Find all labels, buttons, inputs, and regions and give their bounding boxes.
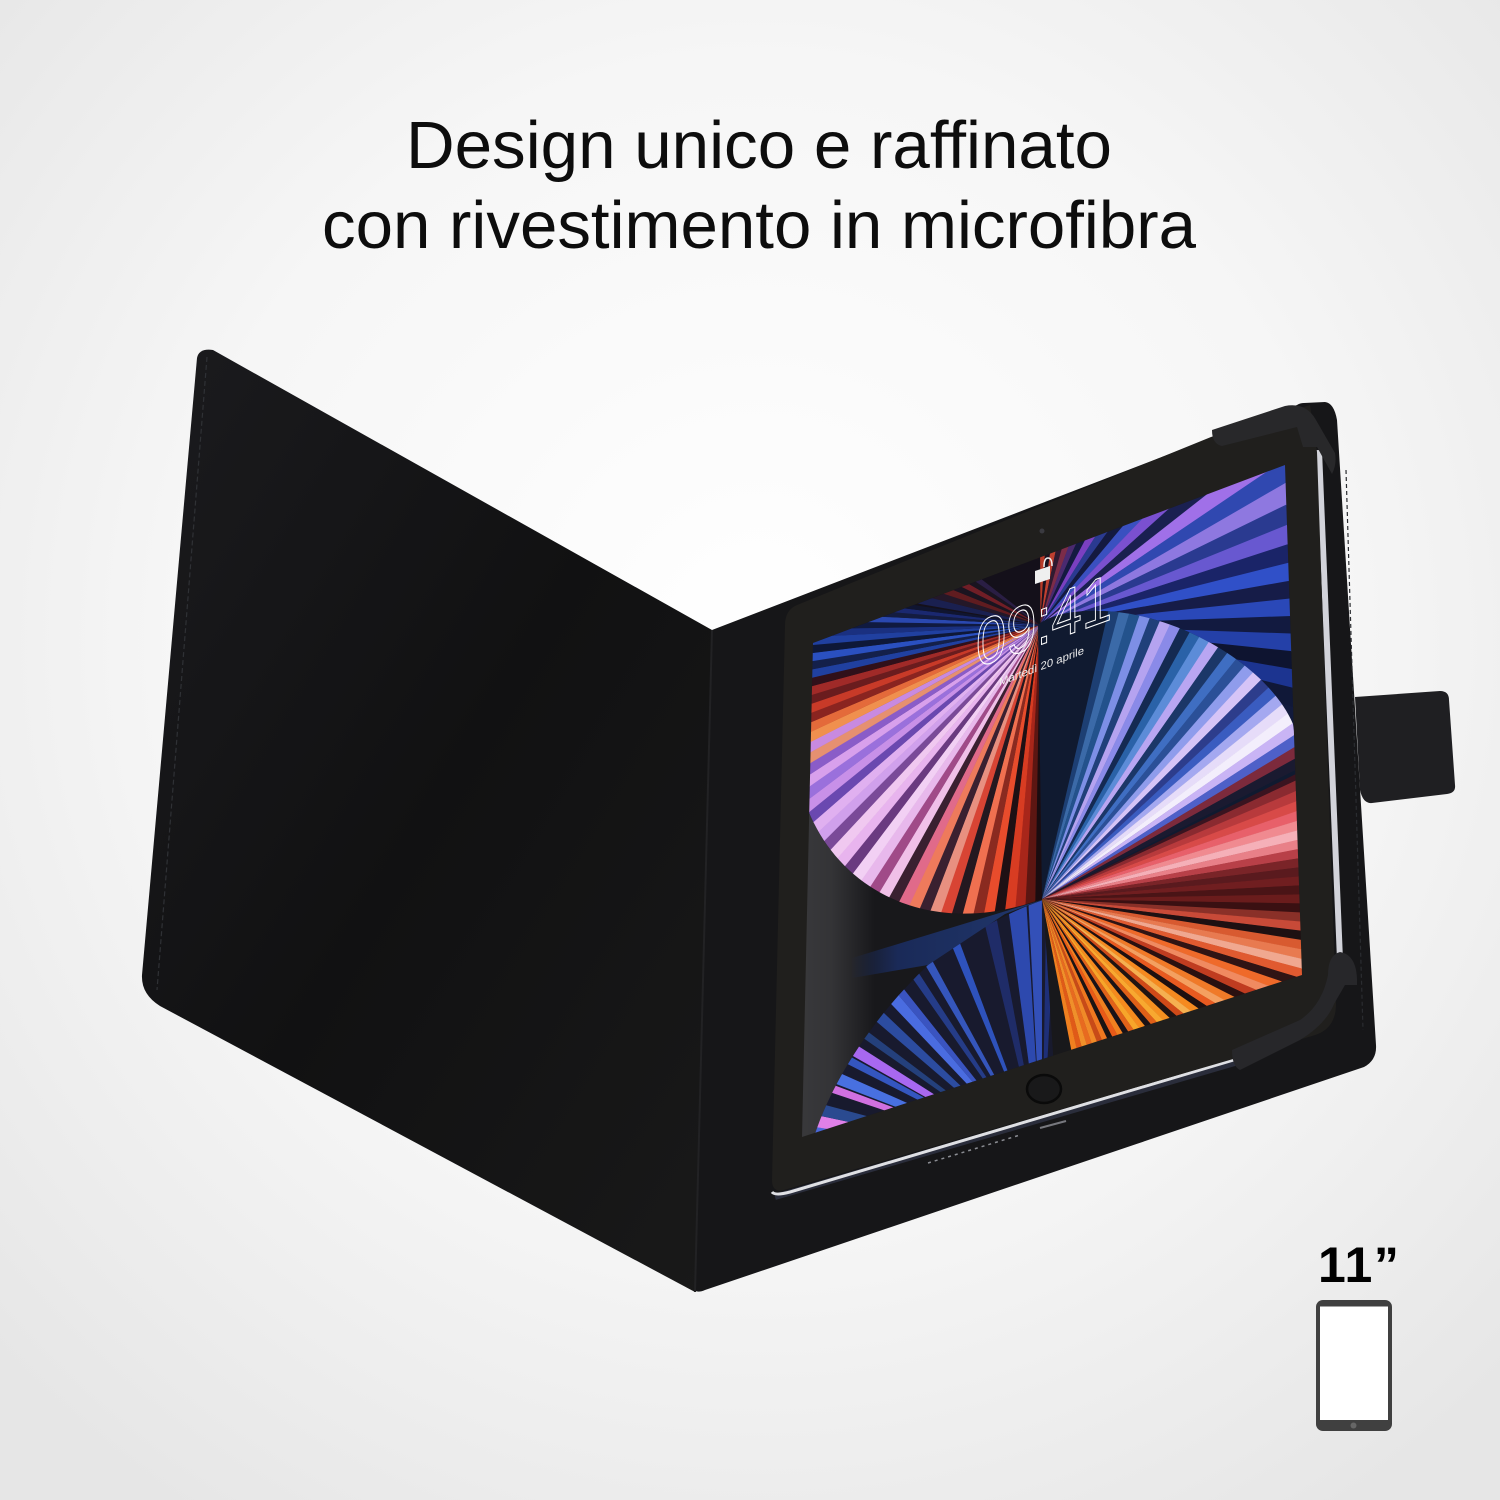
left ellipse and top left rays: [809, 558, 1042, 914]
corner holder top right: [1212, 405, 1336, 474]
lock screen date: Martedì 20 aprile: [999, 645, 1084, 689]
ellipse right rays: [1038, 610, 1296, 899]
icon: tablet size: [1316, 1300, 1392, 1431]
screen film: [802, 813, 862, 1137]
strap closure: [1355, 691, 1455, 803]
lower right rays red and orange: [1042, 774, 1302, 1050]
lock icon: [1035, 558, 1052, 584]
cover stitching: [157, 357, 207, 990]
screen wallpaper: [802, 465, 1302, 1137]
case left inner cover: [142, 350, 712, 1292]
lock screen time: 09:41: [976, 560, 1112, 683]
title: con rivestimento in microfibra: [322, 188, 1197, 263]
tablet bottom silver edge: [772, 1058, 1240, 1194]
charging port: [1040, 1121, 1066, 1128]
title: [322, 108, 1197, 263]
top right rays: [1036, 465, 1294, 729]
tablet right silver side: [1319, 450, 1340, 960]
tablet body: [772, 405, 1336, 1191]
spine edge: [695, 630, 712, 1292]
tablet back edge: [775, 1060, 1245, 1197]
case right panel: [692, 402, 1376, 1292]
corner holder bottom right: [1232, 952, 1357, 1070]
size label: 11”: [1318, 1237, 1400, 1293]
camera: [1040, 528, 1044, 534]
speaker dots: [928, 1135, 1020, 1163]
title: Design unico e raffinato: [406, 108, 1112, 183]
case right stitching: [1346, 470, 1363, 1030]
tablet case: [142, 350, 1456, 1292]
home button: [1027, 1075, 1061, 1103]
lower left navy wedge: [852, 900, 1042, 978]
tablet: [770, 406, 1343, 1200]
bottom left rays: [815, 900, 1053, 1133]
